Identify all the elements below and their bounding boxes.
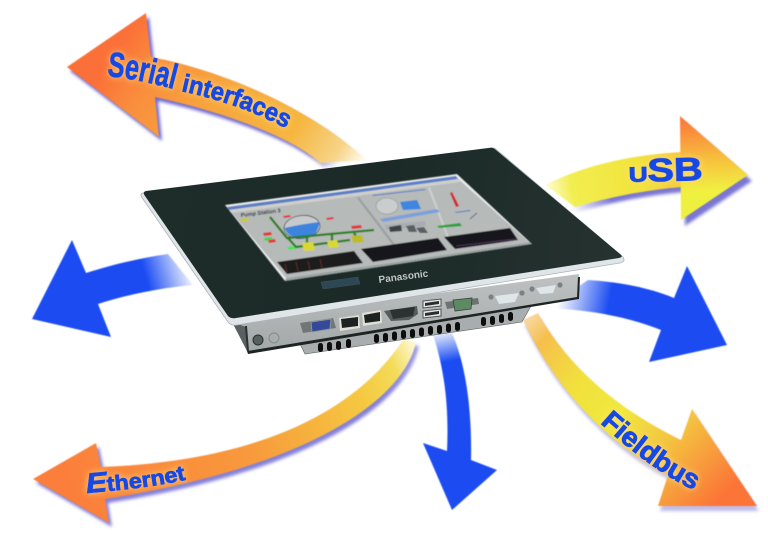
green fieldbus connector xyxy=(445,298,479,309)
VGA port xyxy=(300,318,336,333)
RJ45 port right xyxy=(362,310,382,326)
yellow valves xyxy=(302,242,315,251)
keypad window xyxy=(321,277,360,289)
label: Fieldbus: Fieldbus xyxy=(600,408,700,492)
arrow: blue down xyxy=(423,333,497,510)
screen background xyxy=(227,177,529,278)
arrow: Ethernet xyxy=(32,340,420,528)
arrow: blue right xyxy=(547,266,727,362)
RJ45 port left xyxy=(339,315,360,331)
chart 3 xyxy=(444,228,518,249)
screen bezel xyxy=(225,174,532,281)
rear fin plate xyxy=(298,306,531,354)
divider columns xyxy=(357,197,397,248)
metal housing xyxy=(238,274,579,351)
USB ports xyxy=(423,299,441,308)
serial DB9 port xyxy=(384,306,418,321)
label: Ethernet: Ethernet xyxy=(84,464,188,497)
arrow: Serial interfaces xyxy=(66,12,366,168)
front dark face xyxy=(144,148,622,318)
title bar xyxy=(227,176,458,210)
green pipes xyxy=(270,217,374,247)
label: Serial interfaces: Serial xyxy=(105,48,182,91)
label: Serial interfaces xyxy=(105,48,292,129)
label: Serial interfaces: interfaces xyxy=(180,72,292,129)
right panel gauges xyxy=(376,198,398,214)
label: USB: USB xyxy=(628,151,703,189)
small heading on screen: Pump Station 3 xyxy=(241,208,281,219)
red thermometer xyxy=(450,192,459,207)
tank xyxy=(283,214,321,240)
arrow: USB xyxy=(545,116,752,226)
ventilation slots xyxy=(318,312,513,352)
chart 1 xyxy=(277,251,363,274)
arrow: Fieldbus xyxy=(523,312,760,513)
status lamps xyxy=(263,232,272,236)
blank D-sub covers xyxy=(495,293,519,304)
ports xyxy=(253,282,563,345)
touch screen xyxy=(225,174,532,281)
arrow: blue left xyxy=(32,240,193,337)
panel PC xyxy=(141,148,624,354)
silver frame xyxy=(141,148,624,325)
Panasonic logo: Panasonic xyxy=(378,268,429,286)
chart 2 xyxy=(361,238,447,262)
grounding screw xyxy=(253,335,263,345)
